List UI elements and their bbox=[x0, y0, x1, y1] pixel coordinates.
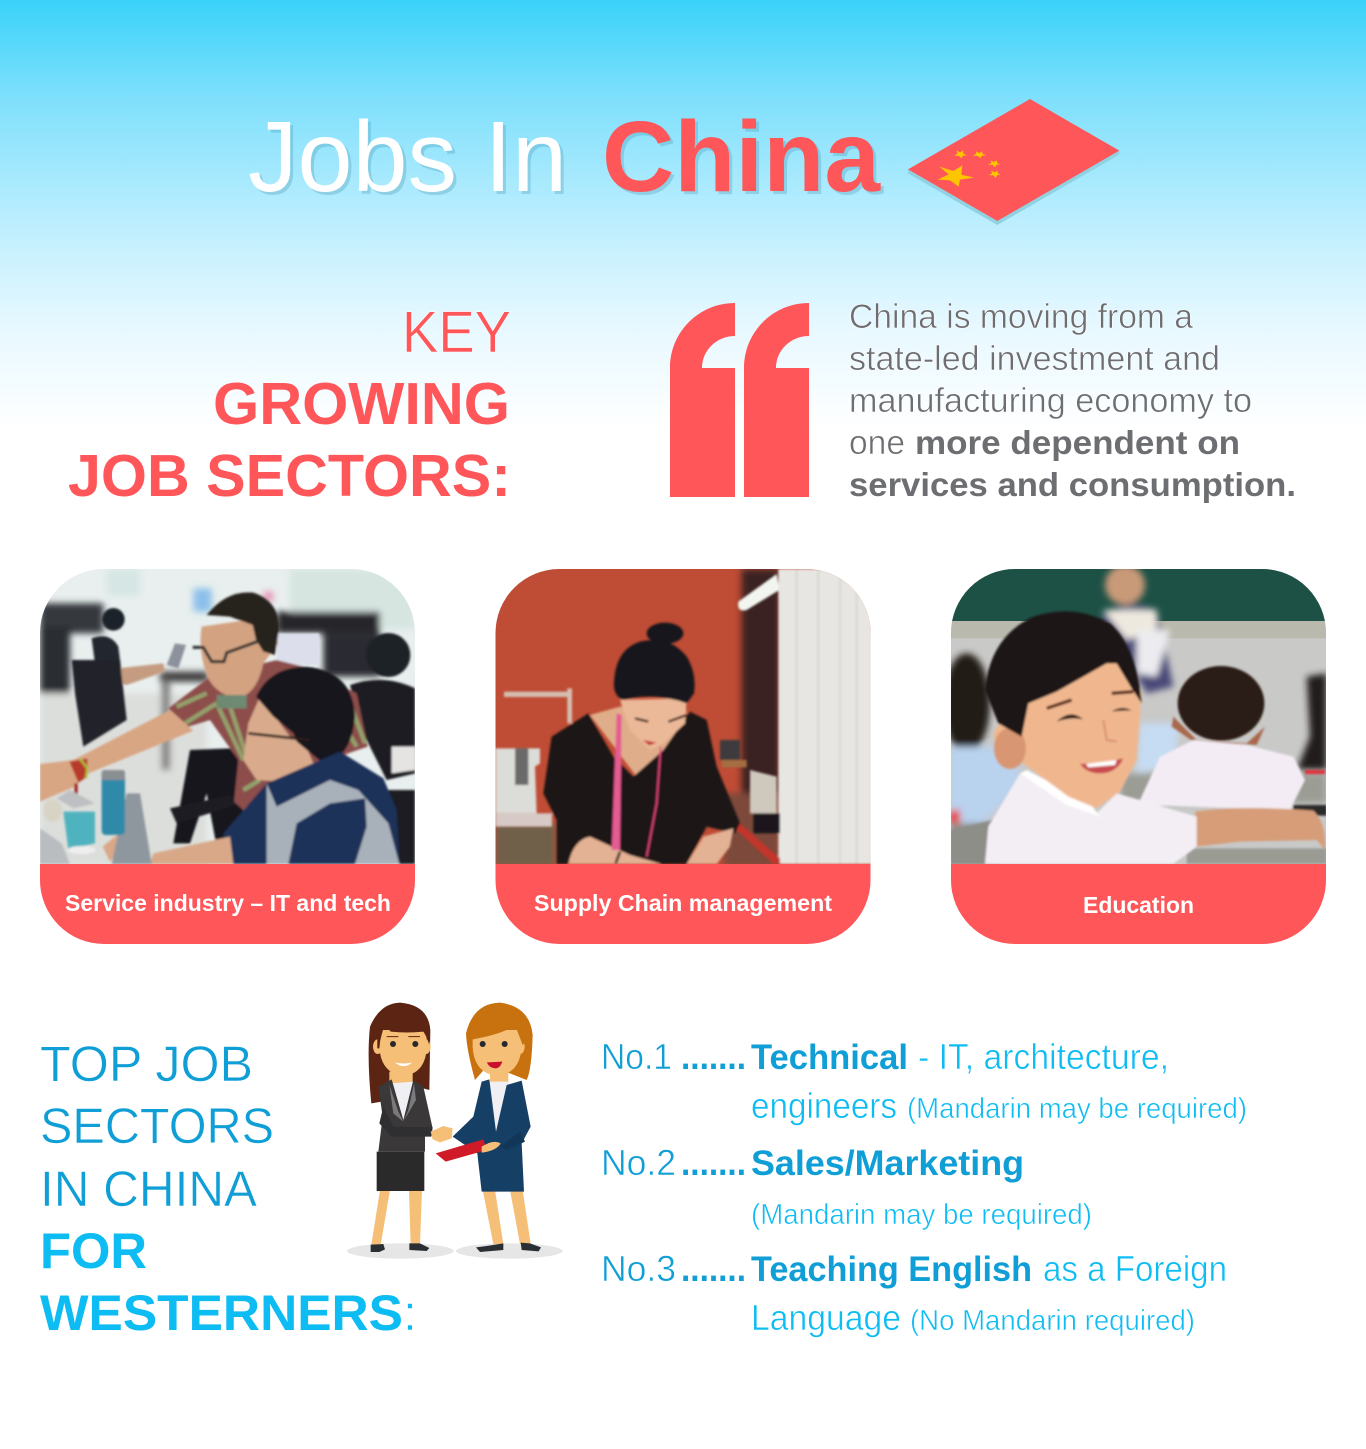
list item 1 bbox=[601, 1036, 1247, 1126]
list item 1: - IT, architecture, bbox=[918, 1036, 1169, 1077]
heading: top job sectors for westerners: IN CHINA bbox=[40, 1161, 258, 1217]
quote text: more dependent on bbox=[915, 424, 1240, 461]
list item 1: ....... bbox=[681, 1036, 746, 1077]
caption bar: supply chain: Supply Chain management bbox=[534, 890, 832, 916]
caption bar: supply chain bbox=[496, 864, 870, 944]
list item 1: (Mandarin may be required) bbox=[907, 1093, 1247, 1125]
quote text: services and consumption. bbox=[849, 466, 1296, 503]
list item 3: (No Mandarin required) bbox=[910, 1305, 1195, 1337]
illustration: two businesswomen shaking hands bbox=[347, 1003, 563, 1259]
heading: key growing job sectors bbox=[68, 300, 511, 509]
photo: IT office workers bbox=[30, 560, 420, 870]
list: top job sectors bbox=[601, 1036, 1247, 1338]
caption bar: education: Education bbox=[1083, 892, 1194, 918]
title bbox=[248, 101, 881, 213]
heading: top job sectors for westerners: FOR bbox=[40, 1223, 147, 1279]
list item 2: Sales/Marketing bbox=[751, 1144, 1024, 1183]
quote text: China is moving from a bbox=[849, 298, 1193, 336]
caption bar: education bbox=[951, 864, 1326, 944]
list item 3: ....... bbox=[681, 1248, 746, 1289]
heading: top job sectors for westerners: TOP JOB bbox=[40, 1036, 253, 1092]
panel: supply chain management card bbox=[490, 560, 880, 944]
list item 1: No.1 bbox=[601, 1036, 672, 1077]
list item 3: as a Foreign bbox=[1043, 1248, 1227, 1289]
quote text bbox=[849, 298, 1296, 503]
quote text: state-led investment and bbox=[849, 340, 1220, 378]
panel: service industry card bbox=[30, 560, 420, 944]
right woman bbox=[453, 1003, 541, 1252]
list item 3: No.3 bbox=[601, 1248, 676, 1289]
heading: key growing job sectors: GROWING bbox=[213, 371, 510, 437]
list item 2: ....... bbox=[681, 1142, 746, 1183]
heading: key growing job sectors: KEY bbox=[402, 300, 511, 365]
handshake and red folder bbox=[431, 1126, 501, 1162]
heading: top job sectors for westerners bbox=[40, 1036, 417, 1341]
title: Jobs In bbox=[248, 101, 567, 213]
background gradient bbox=[0, 0, 1366, 430]
caption bar: service industry: Service industry – IT and tech bbox=[65, 890, 391, 916]
list item 1: engineers bbox=[751, 1085, 897, 1126]
list item 2: No.2 bbox=[601, 1142, 676, 1183]
left woman bbox=[369, 1003, 433, 1252]
list item 3: Language bbox=[751, 1297, 901, 1338]
heading: top job sectors for westerners: SECTORS bbox=[40, 1098, 274, 1154]
list item 1: Technical bbox=[751, 1038, 908, 1077]
list item 2 bbox=[601, 1142, 1092, 1231]
caption bar: service industry bbox=[40, 864, 415, 944]
photo: seamstress at work bbox=[490, 560, 880, 870]
icon: isometric China flag bbox=[908, 99, 1119, 225]
quote text: one bbox=[849, 424, 905, 462]
panel: education card bbox=[940, 560, 1330, 944]
title: China bbox=[602, 101, 881, 213]
list item 2: (Mandarin may be required) bbox=[751, 1199, 1092, 1231]
heading: key growing job sectors: JOB SECTORS: bbox=[68, 443, 511, 509]
icon: quotation mark bbox=[670, 303, 809, 497]
list item 3 bbox=[601, 1248, 1227, 1338]
heading: top job sectors for westerners: WESTERNERS bbox=[40, 1285, 403, 1341]
list item 3: Teaching English bbox=[751, 1250, 1032, 1289]
quote text: manufacturing economy to bbox=[849, 382, 1252, 420]
heading: top job sectors for westerners: : bbox=[403, 1285, 417, 1341]
photo: smiling schoolboy bbox=[940, 560, 1330, 870]
